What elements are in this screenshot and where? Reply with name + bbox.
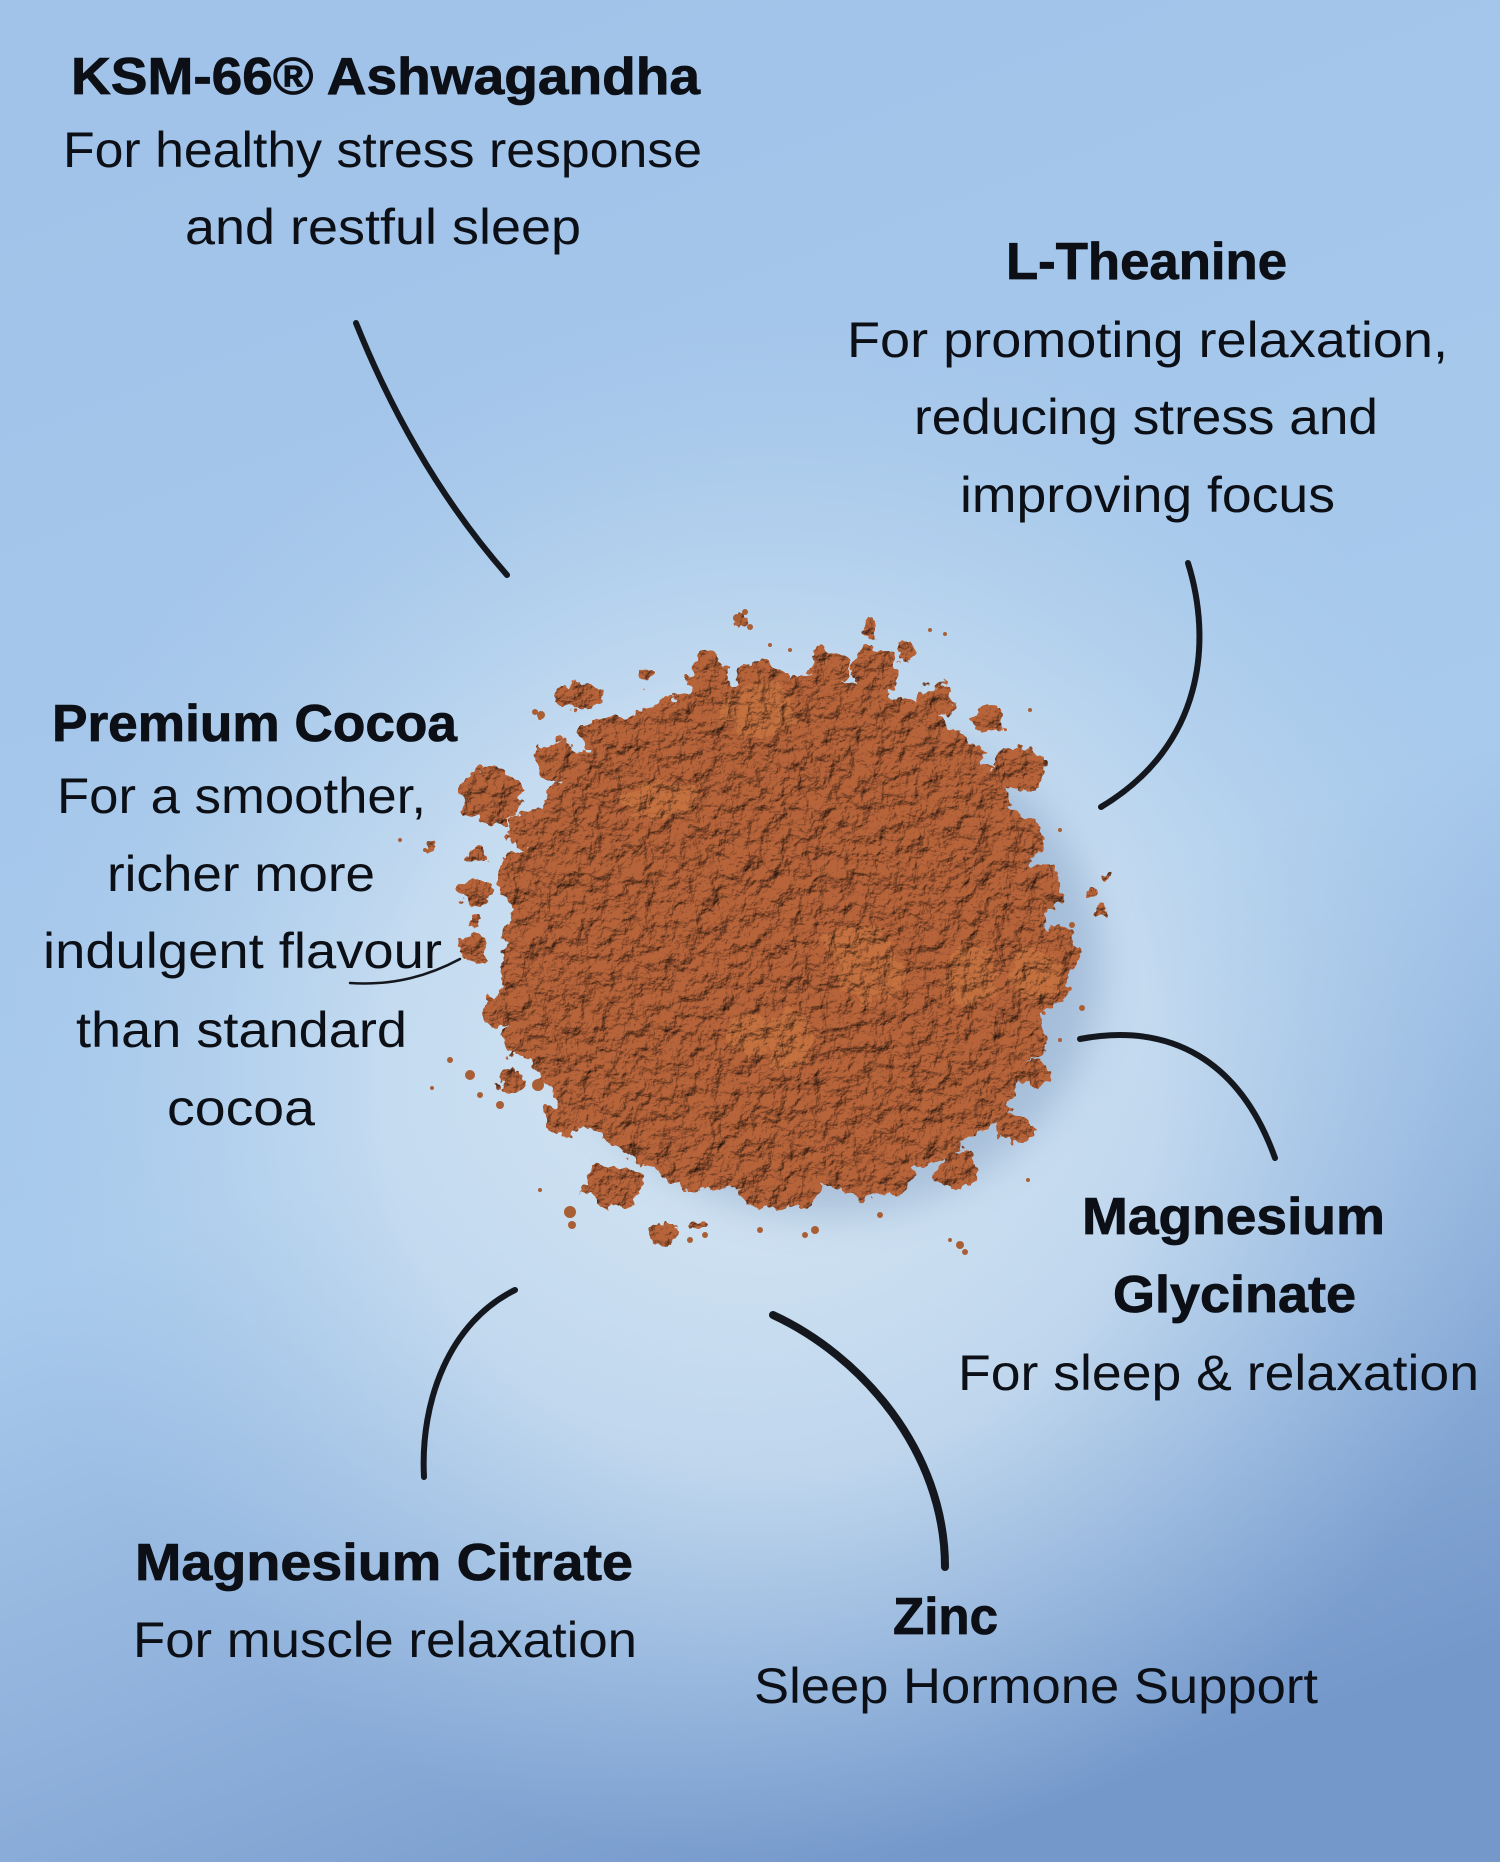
heading: [1082, 1188, 1385, 1324]
description: Sleep Hormone Support: [754, 1658, 1318, 1714]
description: than standard: [76, 1002, 407, 1058]
heading: Magnesium: [1082, 1188, 1385, 1246]
arrow: Magnesium Glycinate connector: [1080, 1035, 1275, 1158]
heading: Glycinate: [1113, 1266, 1356, 1324]
illustration: cocoa powder pile: [425, 613, 1112, 1247]
description: For muscle relaxation: [133, 1612, 637, 1668]
description: improving focus: [960, 467, 1335, 523]
heading: Magnesium Citrate: [135, 1534, 633, 1592]
powder shadow: [550, 715, 1100, 1215]
heading: L-Theanine: [1006, 233, 1287, 291]
heading: Zinc: [893, 1588, 998, 1646]
description: cocoa: [167, 1080, 315, 1136]
scattered powder crumbs: [398, 609, 1085, 1255]
description: For healthy stress response: [63, 122, 702, 178]
arrow: Zinc connector: [773, 1315, 945, 1567]
callout: Magnesium Glycinate: [958, 1188, 1479, 1401]
loose chunks: [425, 613, 1112, 1247]
lighter lumps: [620, 684, 1062, 1070]
callout: Premium Cocoa: [43, 695, 458, 1136]
arrow: L-Theanine connector: [1101, 563, 1199, 807]
arrow: Ashwagandha connector: [356, 323, 507, 575]
callout: Zinc: [754, 1588, 1318, 1714]
description: For a smoother,: [57, 768, 426, 824]
callout: Magnesium Citrate: [133, 1534, 637, 1668]
callout: L-Theanine: [847, 233, 1448, 523]
description: richer more: [107, 846, 375, 902]
heading: Premium Cocoa: [52, 695, 458, 753]
arrow: Magnesium Citrate connector: [424, 1290, 515, 1477]
description: [43, 768, 442, 1136]
arrow: Premium Cocoa connector: [350, 959, 460, 983]
description: reducing stress and: [914, 389, 1378, 445]
description: For promoting relaxation,: [847, 312, 1448, 368]
description: For sleep & relaxation: [958, 1345, 1479, 1401]
description: [847, 312, 1448, 523]
description: [63, 122, 702, 255]
heading: KSM-66® Ashwagandha: [71, 48, 701, 106]
description: and restful sleep: [185, 199, 581, 255]
description: indulgent flavour: [43, 923, 442, 979]
pile body: [501, 679, 1047, 1189]
callout: KSM-66 Ashwagandha: [63, 48, 702, 255]
